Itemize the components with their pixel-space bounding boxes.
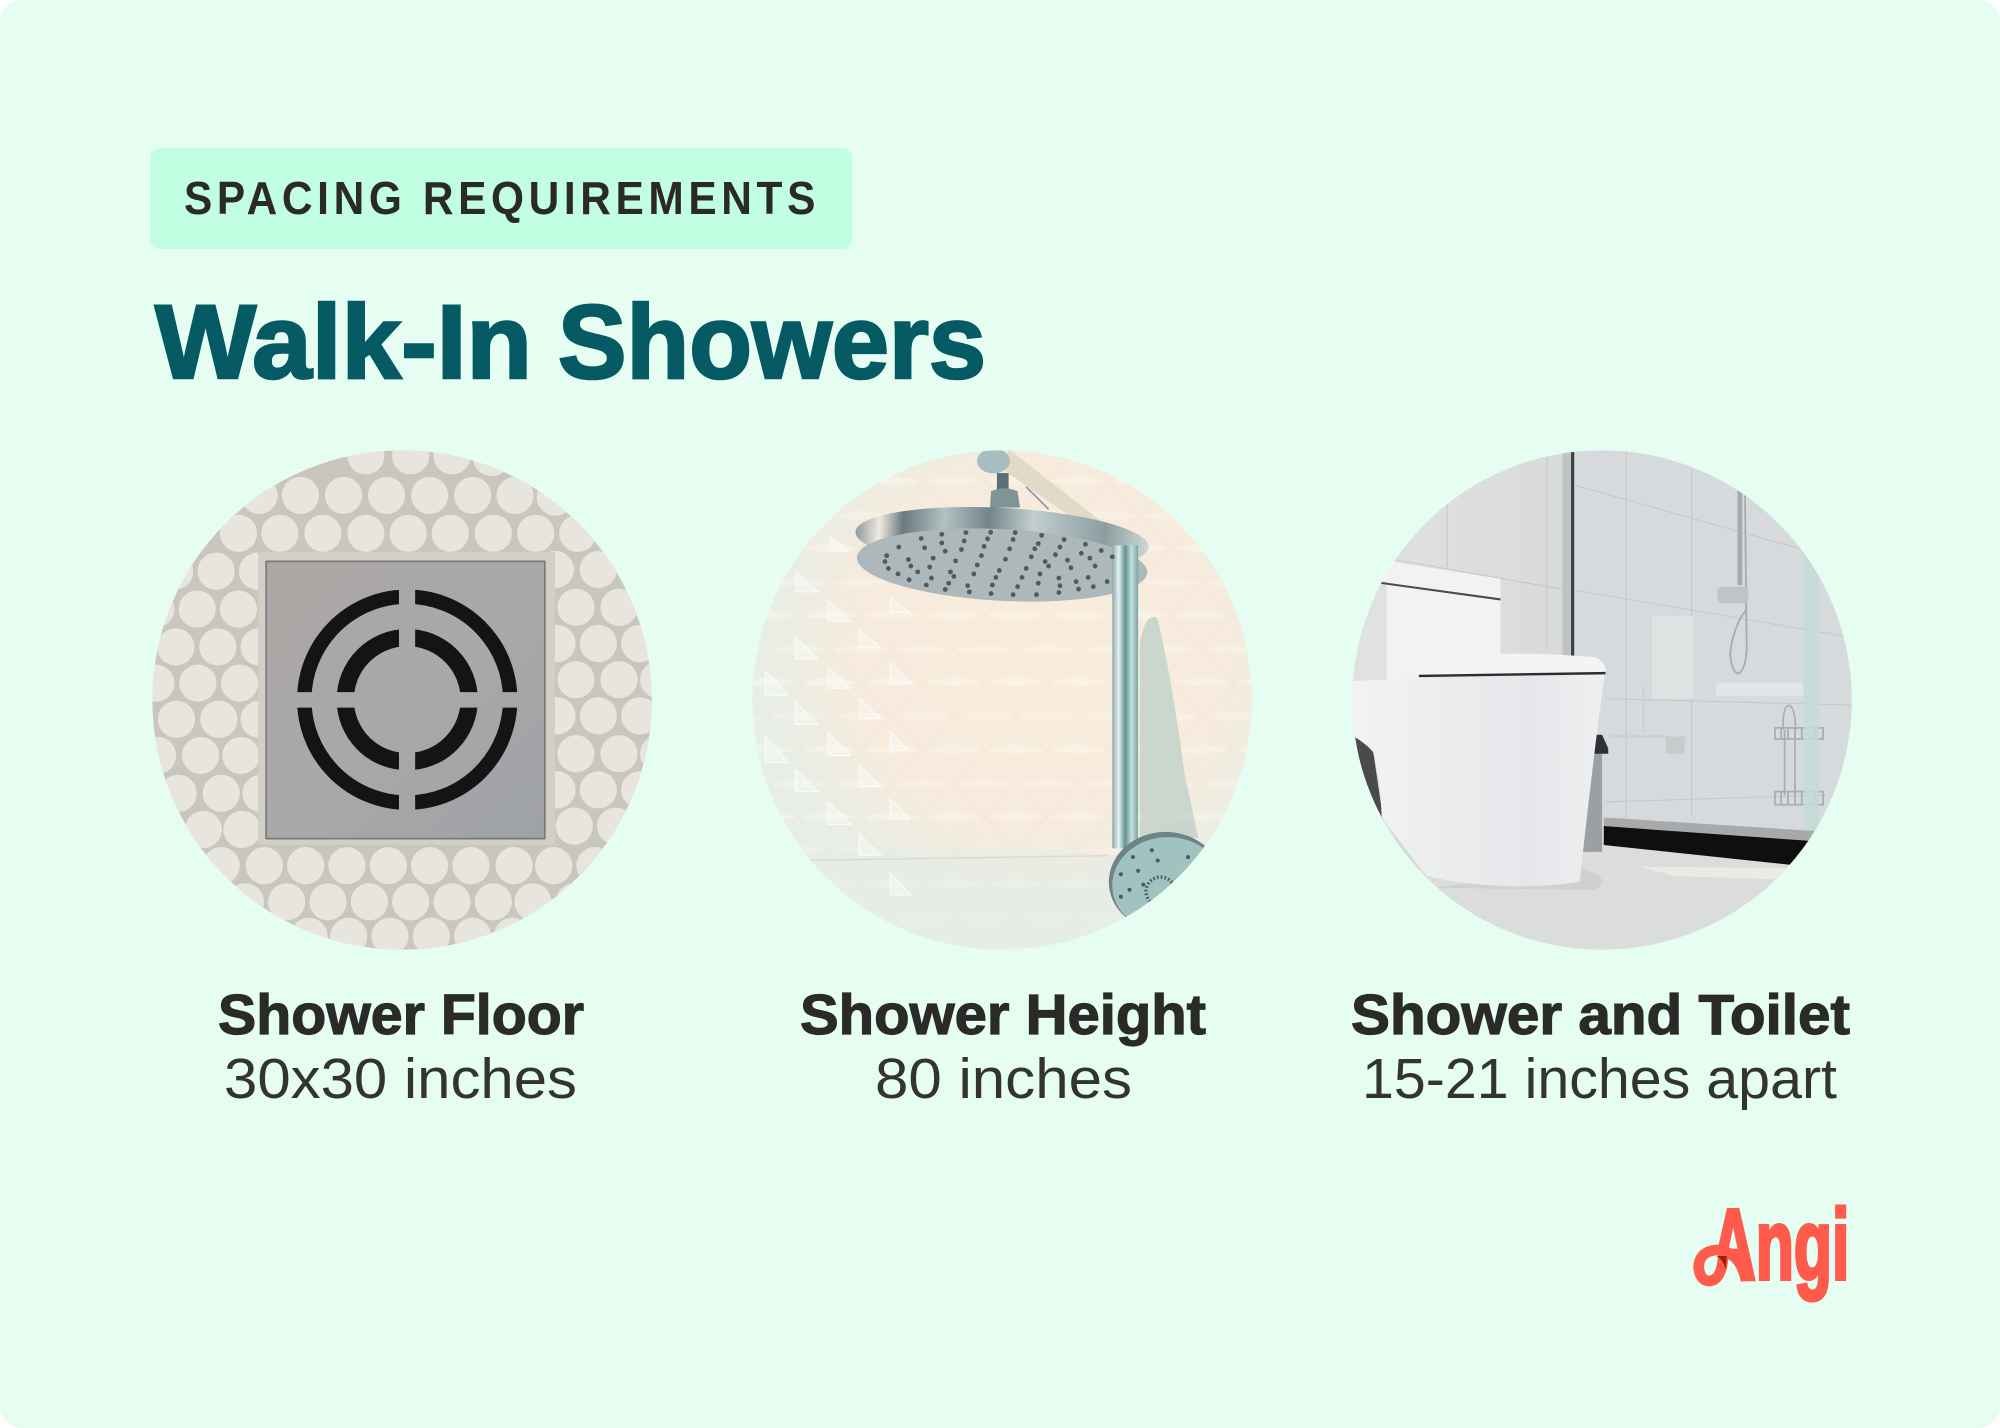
label: shower and toilet bbox=[1351, 983, 1850, 1111]
shelf bbox=[1716, 683, 1809, 696]
dark base bbox=[1355, 736, 1384, 820]
caddy bbox=[1775, 706, 1823, 805]
badge: spacing requirements bbox=[150, 148, 852, 249]
title: Showers bbox=[558, 284, 986, 401]
photo: shower floor drain bbox=[152, 450, 652, 950]
wall highlight triangles bbox=[765, 537, 911, 895]
logo: Angi: Angi bbox=[1711, 1189, 1849, 1301]
shower fixture bbox=[1730, 489, 1747, 674]
label: shower floor: 30x30 inches bbox=[224, 1047, 577, 1111]
wall tile lines bbox=[1392, 451, 1867, 819]
label: shower and toilet: 15-21 inches apart bbox=[1362, 1047, 1837, 1111]
label: shower height: Shower Height bbox=[800, 983, 1206, 1047]
label: shower height bbox=[800, 983, 1206, 1111]
seat lid bbox=[1436, 654, 1606, 674]
toilet bowl bbox=[1349, 675, 1605, 886]
toilet tank bbox=[1375, 559, 1500, 681]
label: shower floor bbox=[218, 983, 584, 1111]
glass edge bbox=[1804, 551, 1819, 833]
logo: Angi bbox=[1697, 1189, 1849, 1301]
floor bbox=[1746, 860, 1790, 865]
title: Walk-In bbox=[155, 284, 532, 401]
cast shadow bbox=[1140, 617, 1198, 838]
vertical door frame bbox=[1562, 451, 1571, 671]
stem bbox=[1112, 545, 1138, 848]
label: shower floor: Shower Floor bbox=[218, 983, 584, 1047]
reflected tank bbox=[1691, 616, 1692, 698]
photo: rain shower head bbox=[752, 450, 1252, 950]
head rim and plate bbox=[856, 507, 1148, 558]
label: shower height: 80 inches bbox=[875, 1047, 1132, 1111]
title bbox=[155, 284, 986, 401]
bin bbox=[1583, 754, 1602, 852]
label: shower and toilet: Shower and Toilet bbox=[1351, 983, 1850, 1047]
hand shower bbox=[1108, 832, 1205, 917]
shower threshold bbox=[1604, 817, 1819, 842]
arm bbox=[1006, 450, 1100, 521]
photo: toilet and shower bbox=[1352, 450, 1852, 950]
badge: spacing requirements: SPACING REQUIREMENTS bbox=[184, 172, 820, 224]
